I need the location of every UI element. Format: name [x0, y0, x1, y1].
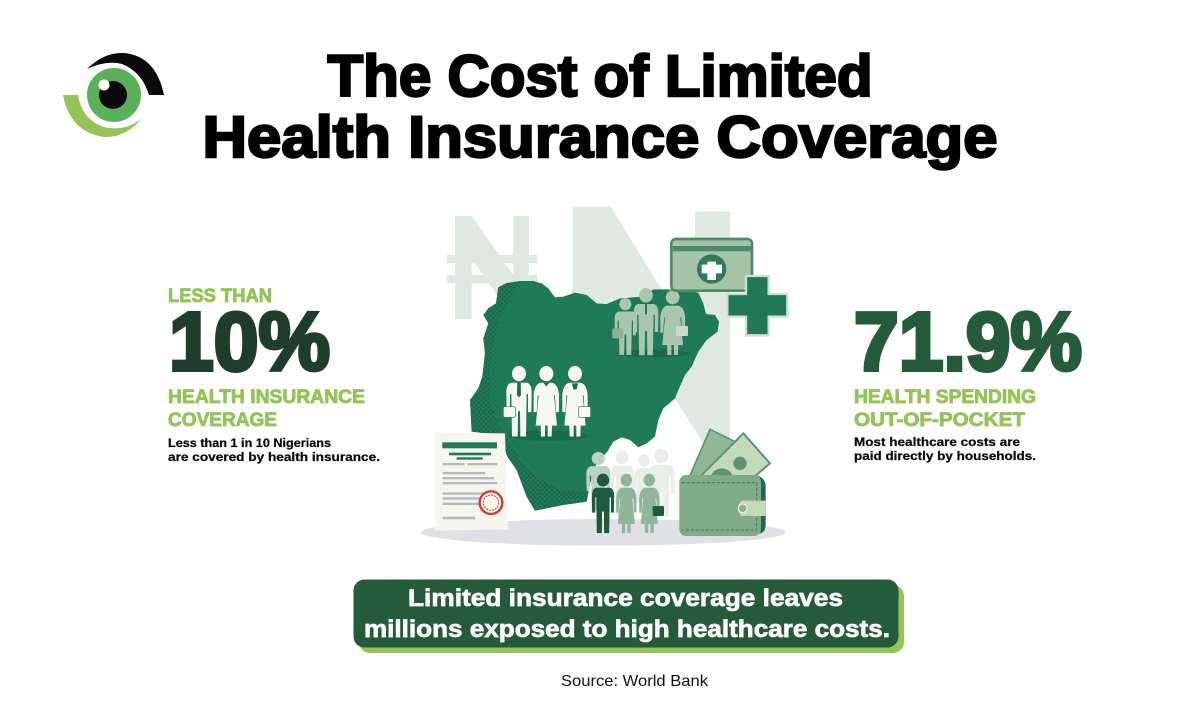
number: 10%: 10% — [169, 295, 330, 388]
label: health spending out-of-pocket: HEALTH SPENDING — [854, 387, 1036, 408]
label: health insurance coverage: COVERAGE — [168, 410, 277, 431]
background naira symbols — [447, 207, 730, 443]
description: left: Less than 1 in 10 Nigerians — [168, 436, 331, 450]
callout text — [364, 585, 890, 643]
logo: eye — [63, 53, 164, 137]
callout text: millions exposed to high healthcare costs. — [364, 616, 890, 643]
description: left — [168, 436, 380, 464]
label: less than: LESS THAN — [168, 286, 272, 307]
number: 71.9%: 71.9% — [854, 295, 1082, 388]
ground shadow — [421, 519, 786, 546]
left statistic panel — [168, 286, 380, 464]
foreground group of three — [592, 474, 664, 533]
icon: medical cross — [727, 276, 787, 335]
label: health insurance coverage: HEALTH INSURANCE — [168, 387, 365, 408]
white group of three professionals — [503, 366, 591, 441]
health insurance card icon — [671, 239, 752, 291]
label: health insurance coverage — [168, 387, 365, 431]
title: Health Insurance Coverage — [202, 105, 998, 170]
callout banner — [354, 580, 904, 653]
label: health spending out-of-pocket — [854, 387, 1036, 431]
description: right: Most healthcare costs are — [854, 435, 1020, 449]
description: right — [854, 435, 1036, 463]
icon: wallet with cash — [679, 429, 770, 536]
title — [202, 44, 998, 170]
callout text: Limited insurance coverage leaves — [408, 585, 843, 612]
light green group of three — [612, 288, 690, 357]
right statistic panel — [854, 295, 1082, 463]
description: left: are covered by health insurance. — [168, 450, 380, 464]
title: The Cost of Limited — [328, 44, 872, 109]
icon: insurance document — [434, 433, 508, 531]
map of Nigeria — [470, 281, 719, 511]
description: right: paid directly by households. — [854, 449, 1036, 463]
central illustration — [421, 207, 787, 546]
source note: Source: World Bank — [561, 673, 709, 690]
label: health spending out-of-pocket: OUT-OF-POCKET — [854, 410, 1025, 431]
faded crowd — [586, 449, 674, 517]
